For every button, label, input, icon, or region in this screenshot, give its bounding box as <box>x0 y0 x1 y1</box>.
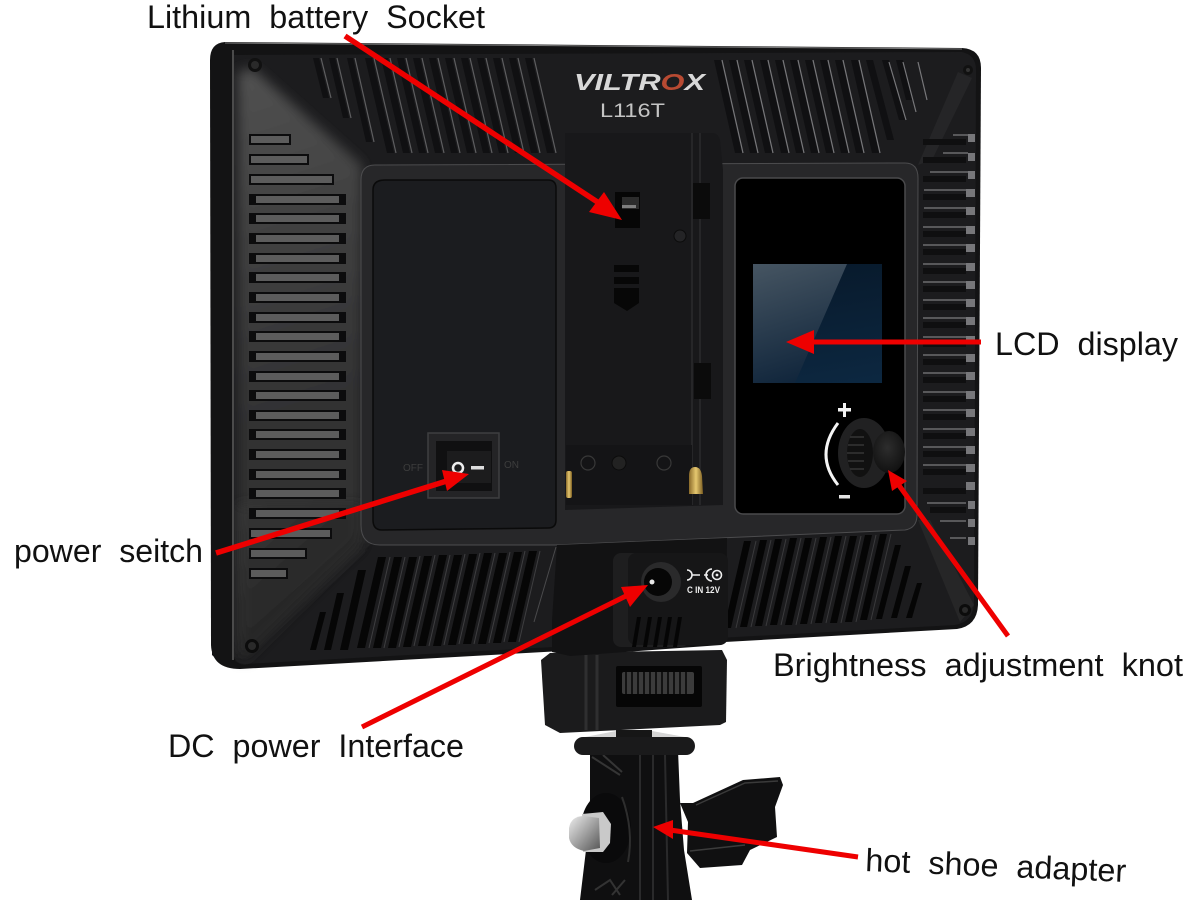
bottom-left shaded corner <box>238 505 362 660</box>
top-right vents <box>714 60 927 153</box>
brand logo: VILTR O X <box>574 69 707 95</box>
plate rail marks <box>614 265 639 311</box>
left battery cover <box>373 180 556 530</box>
arrow: DC power interface <box>362 585 648 727</box>
label: Lithium battery Socket: Lithium battery Socket <box>147 0 485 35</box>
power switch: OFF <box>403 463 423 474</box>
label: Brightness adjustment knot: Brightness adjustment knot <box>773 647 1183 683</box>
label: power seitch: power seitch <box>14 533 203 569</box>
power switch <box>403 433 519 498</box>
LED panel body <box>210 42 981 669</box>
LCD window <box>735 178 905 514</box>
screws <box>245 58 973 653</box>
adapter wing nut <box>680 777 783 868</box>
label: LCD display: LCD display <box>995 326 1178 362</box>
LCD screen <box>753 264 882 383</box>
bottom-right vents <box>724 534 922 628</box>
top-left vents <box>313 58 556 153</box>
adapter collar <box>585 731 685 737</box>
arrow: lithium battery socket <box>345 36 622 220</box>
arrow: brightness adjustment knob <box>888 470 1008 636</box>
right diagonal sheen <box>918 72 972 165</box>
arrow: hot shoe adapter <box>653 820 858 857</box>
right vent fins <box>923 134 975 545</box>
tilt bracket with wheel <box>541 650 727 733</box>
battery plate <box>565 133 723 510</box>
power switch: ON <box>504 460 519 471</box>
left textured band <box>238 68 362 655</box>
arrow: LCD display <box>786 330 981 354</box>
arrow: power switch <box>216 470 469 553</box>
model name: L116T <box>600 101 665 122</box>
stand: hot shoe adapter <box>569 730 783 900</box>
label: hot shoe adapter: hot shoe adapter <box>865 842 1127 889</box>
DC input block <box>534 538 728 656</box>
bottom-left vents <box>310 551 540 650</box>
DC polarity icon <box>687 569 722 581</box>
right bottom diagonal <box>918 520 974 622</box>
brass contacts <box>566 471 572 498</box>
label: DC power Interface: DC power Interface <box>168 728 464 764</box>
bolt and nut <box>581 793 631 863</box>
brightness knob <box>826 403 905 498</box>
DC input block: C IN 12V <box>687 585 720 595</box>
inner frame <box>361 163 918 545</box>
left vent slots <box>250 135 345 578</box>
battery latch <box>615 192 640 228</box>
adapter body <box>580 750 692 900</box>
